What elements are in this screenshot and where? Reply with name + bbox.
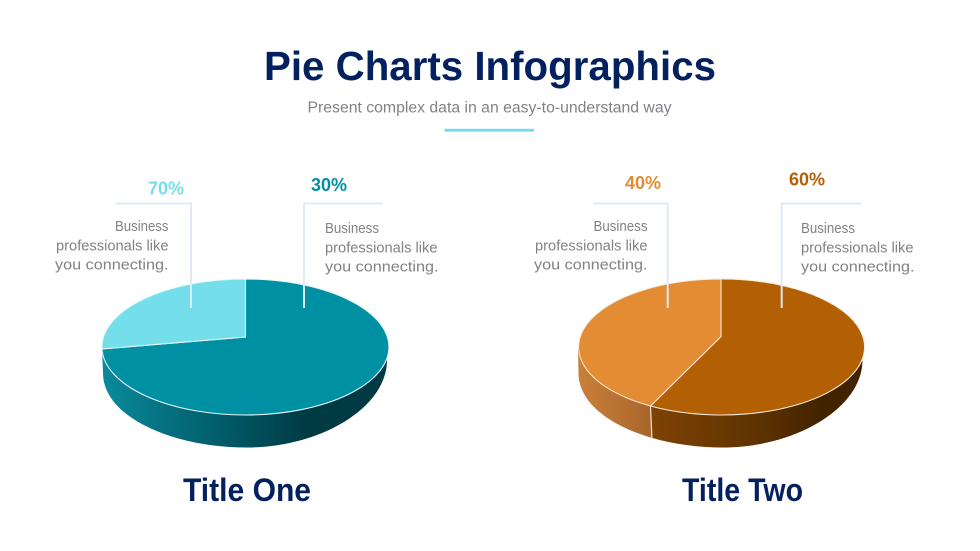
pie side: light orange	[578, 349, 652, 438]
description: professionals like	[801, 240, 914, 256]
panel: right pie chart	[578, 279, 865, 448]
leader line	[593, 204, 668, 308]
description: you connecting.	[325, 260, 438, 276]
description: you connecting.	[534, 258, 648, 274]
heading: Title Two: Title Two	[682, 472, 803, 508]
panel: left pie chart	[102, 279, 389, 448]
pie slice: dark orange	[650, 279, 865, 415]
description: Business	[115, 219, 168, 235]
value: 70%	[148, 178, 184, 198]
subtitle: Present complex data in an easy-to-understand way	[308, 100, 672, 116]
description: Business	[594, 219, 648, 235]
pie slice: light orange	[579, 279, 721, 406]
callout: 70%	[55, 178, 191, 308]
description: you connecting.	[801, 260, 914, 276]
description: Business	[801, 221, 855, 237]
side divider	[650, 406, 652, 438]
description: you connecting.	[55, 258, 168, 274]
leader line	[782, 204, 861, 308]
callout: 40%	[534, 173, 668, 308]
pie side: dark brown	[650, 347, 864, 448]
pie side: teal	[102, 347, 389, 448]
pie slice: light cyan	[102, 279, 245, 349]
leader line	[116, 204, 191, 308]
leader line	[304, 204, 383, 308]
title: Pie Charts Infographics	[264, 43, 716, 89]
description: professionals like	[535, 238, 648, 254]
value: 30%	[311, 175, 347, 195]
callout: 60%	[782, 170, 914, 308]
description: professionals like	[325, 240, 438, 256]
pie slice: teal large	[102, 279, 389, 415]
heading: Title One: Title One	[183, 472, 311, 508]
value: 40%	[625, 173, 661, 193]
value: 60%	[789, 170, 825, 190]
description: professionals like	[56, 238, 168, 254]
title underline	[444, 129, 534, 132]
callout: 30%	[304, 175, 438, 308]
description: Business	[325, 221, 379, 237]
